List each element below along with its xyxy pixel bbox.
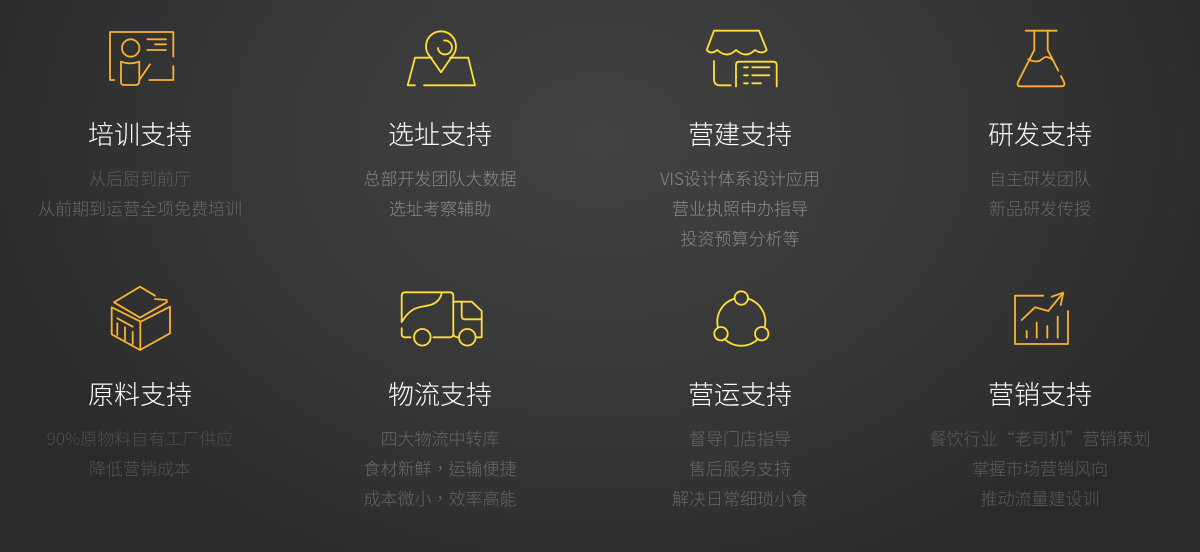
text block: 投资预算分析等 (680, 225, 800, 250)
panel: 原料支持 (47, 287, 233, 480)
text block: 解决日常细琐小食 (672, 485, 808, 510)
panel: 营建支持 (660, 31, 820, 250)
text block: 从前期到运营全项免费培训 (38, 195, 242, 220)
icon: storefront (707, 31, 777, 86)
heading: 原料支持 (88, 375, 192, 412)
text block: 从后厨到前厅 (89, 165, 191, 190)
text block (38, 165, 242, 220)
text block: 督导门店指导 (689, 425, 791, 450)
heading: 选址支持 (388, 115, 492, 152)
icon: three-node cycle (714, 291, 768, 346)
heading: 物流支持 (388, 375, 492, 412)
heading: 营运支持 (688, 375, 792, 412)
heading: 研发支持 (988, 115, 1092, 152)
icon: growth chart (1015, 293, 1068, 344)
text block (672, 425, 808, 510)
heading: 营销支持 (988, 375, 1092, 412)
panel: 营运支持 (672, 291, 808, 510)
text block: 食材新鲜，运输便捷 (364, 455, 516, 480)
text block: 降低营销成本 (89, 455, 191, 480)
text block: 90%原物料自有工厂供应 (47, 425, 233, 450)
text block: 选址考察辅助 (389, 195, 491, 220)
text block: 总部开发团队大数据 (364, 165, 516, 190)
icon: cube box (112, 287, 170, 350)
panel: 研发支持 (988, 31, 1092, 220)
text block: 成本微小，效率高能 (364, 485, 516, 510)
text block (364, 425, 516, 510)
text block: 掌握市场营销风向 (972, 455, 1108, 480)
text block: 餐饮行业“老司机”营销策划 (930, 425, 1150, 450)
icon: flask (1018, 31, 1064, 86)
text block (364, 165, 516, 220)
text block (660, 165, 820, 250)
panel: 营销支持 (930, 293, 1150, 510)
heading: 培训支持 (88, 115, 192, 152)
text block (930, 425, 1150, 510)
text block: 自主研发团队 (989, 165, 1091, 190)
text block: 推动流量建设训 (980, 485, 1100, 510)
panel: 物流支持 (364, 292, 516, 510)
text block: 新品研发传授 (989, 195, 1091, 220)
icon: map pin (408, 31, 475, 85)
text block (989, 165, 1091, 220)
text block (47, 425, 233, 480)
icon: training presenter (110, 32, 173, 85)
icon: delivery truck (402, 292, 482, 346)
text block: 售后服务支持 (689, 455, 791, 480)
text block: 营业执照申办指导 (672, 195, 808, 220)
text block: VIS设计体系设计应用 (660, 165, 820, 190)
heading: 营建支持 (688, 115, 792, 152)
panel: 选址支持 (364, 31, 516, 220)
panel: 培训支持 (38, 32, 242, 220)
text block: 四大物流中转库 (380, 425, 500, 450)
